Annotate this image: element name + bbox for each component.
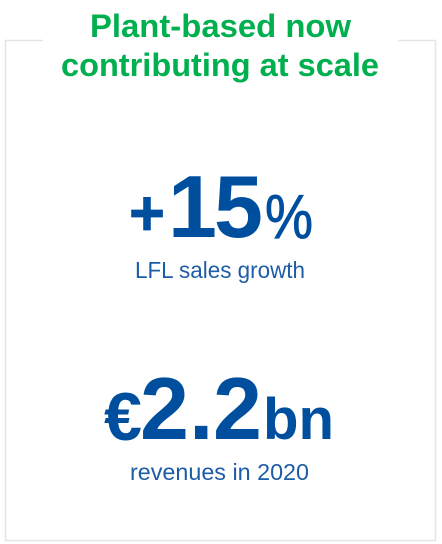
stat value: +15%: 1 (168, 157, 217, 256)
stat value: €2.2bn: 2 (213, 359, 262, 458)
stat value: €2.2bn: bn (263, 387, 334, 452)
stat value: +15%: % (265, 183, 313, 252)
title: contributing at scale (61, 47, 379, 83)
stat value: €2.2bn: . (189, 359, 213, 458)
title (61, 8, 379, 83)
stat value: €2.2bn: € (104, 379, 142, 455)
stat value: €2.2bn (104, 359, 334, 458)
stat label: LFL sales growth: LFL sales growth (135, 257, 305, 283)
stat value: €2.2bn: 2 (140, 359, 189, 458)
title: Plant-based now (90, 8, 351, 44)
stat value: +15% (129, 157, 313, 256)
stat value: +15%: 5 (214, 157, 263, 256)
stat: €2.2bn revenues in 2020 (104, 359, 334, 485)
stat value: +15%: + (129, 177, 165, 249)
stat: +15% LFL sales growth (129, 157, 313, 283)
stat label: revenues in 2020: revenues in 2020 (130, 459, 309, 485)
